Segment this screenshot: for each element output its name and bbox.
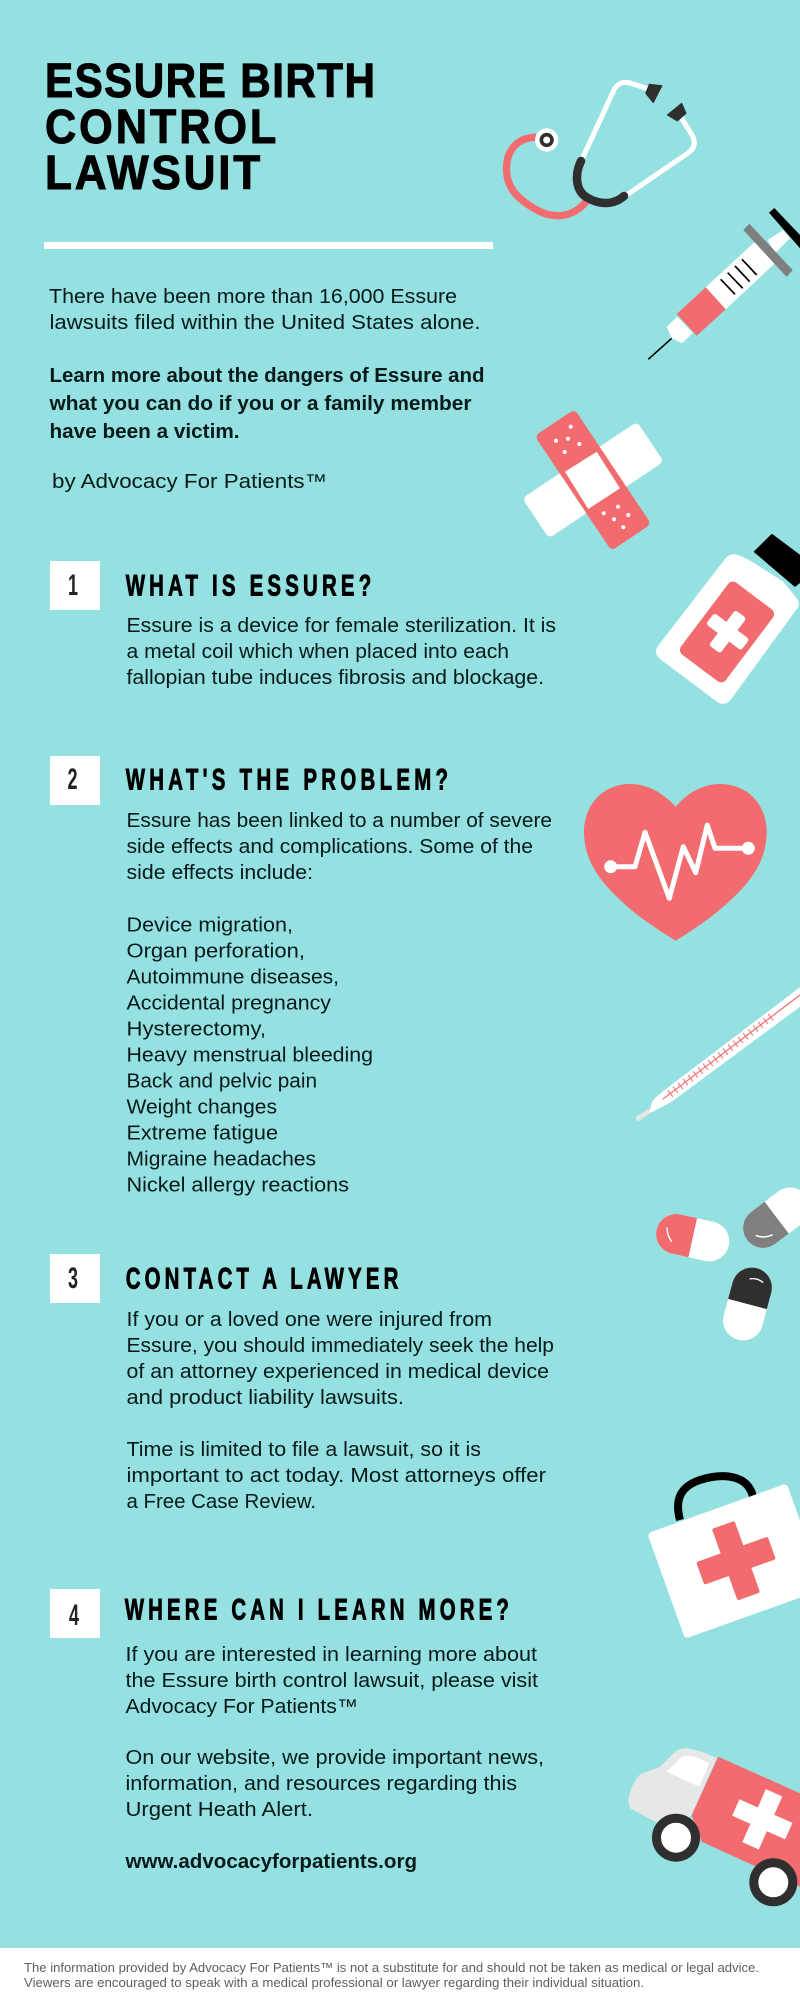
side effects list: Extreme fatigue [126, 1122, 278, 1144]
number badge 1 [50, 561, 100, 610]
body 4: If you are interested in learning more about [126, 1644, 537, 1666]
side effects list: Hysterectomy, [126, 1018, 266, 1040]
icon: heart with pulse [584, 784, 767, 941]
title: CONTROL [45, 100, 276, 154]
body 4: information, and resources regarding this [126, 1773, 517, 1795]
intro text [49, 286, 480, 334]
side effects list [126, 914, 373, 1196]
icon: syringe [648, 208, 800, 359]
body 4 [126, 1644, 544, 1821]
body 3: Essure, you should immediately seek the help [126, 1335, 554, 1357]
icon: bandage [522, 409, 664, 551]
body 3: and product liability lawsuits. [126, 1387, 404, 1409]
body 2: side effects include: [126, 862, 313, 884]
body 3: Time is limited to file a lawsuit, so it is [126, 1439, 481, 1461]
side effects list: Autoimmune diseases, [126, 966, 339, 988]
body 3: important to act today. Most attorneys offer [126, 1465, 546, 1487]
heading 3: CONTACT A LAWYER [126, 1263, 398, 1296]
footer disclaimer: The information provided by Advocacy For Patients™ is not a substitute for and should not be taken as medical or legal advice. [24, 1960, 759, 1975]
pill: black and white [719, 1263, 776, 1345]
number badge 4: 4 [69, 1600, 79, 1632]
title: LAWSUIT [45, 145, 260, 199]
body 2: Essure has been linked to a number of severe [126, 810, 552, 832]
pill: coral and white [652, 1210, 733, 1265]
number badge 3: 3 [68, 1263, 78, 1295]
body 4: the Essure birth control lawsuit, please visit [126, 1670, 538, 1692]
footer disclaimer [0, 1948, 800, 2000]
website link: www.advocacyforpatients.org [124, 1851, 417, 1873]
body 2 [126, 810, 552, 884]
icon: thermometer [638, 987, 800, 1118]
body 4: Urgent Heath Alert. [126, 1799, 313, 1821]
body 2: side effects and complications. Some of the [126, 836, 533, 858]
heading 1: WHAT IS ESSURE? [126, 570, 371, 603]
side effects list: Nickel allergy reactions [126, 1174, 349, 1196]
side effects list: Migraine headaches [126, 1148, 316, 1170]
number badge 3 [50, 1254, 100, 1303]
bold call to learn more [48, 365, 485, 443]
section 1: what is essure [50, 561, 556, 689]
body 3: of an attorney experienced in medical device [126, 1361, 549, 1383]
body 1: fallopian tube induces fibrosis and blockage. [126, 667, 544, 689]
side effects list: Back and pelvic pain [126, 1070, 317, 1092]
side effects list: Heavy menstrual bleeding [126, 1044, 373, 1066]
title: ESSURE BIRTH [45, 53, 375, 108]
section 4: where can i learn more [50, 1589, 544, 1873]
bold call to learn more: have been a victim. [50, 421, 240, 443]
icon: stethoscope [506, 82, 694, 216]
side effects list: Organ perforation, [126, 940, 305, 962]
bold call to learn more: what you can do if you or a family member [48, 393, 472, 415]
number badge 1: 1 [68, 570, 78, 602]
body 1 [126, 615, 556, 689]
section 2: what's the problem [50, 756, 552, 1196]
body 1: Essure is a device for female sterilization. It is [126, 615, 556, 637]
number badge 2: 2 [67, 764, 78, 796]
pill: grey and white [735, 1179, 800, 1256]
body 3: If you or a loved one were injured from [126, 1309, 492, 1331]
number badge 2 [50, 756, 100, 805]
body 1: a metal coil which when placed into each [126, 641, 509, 663]
side effects list: Accidental pregnancy [126, 992, 331, 1014]
body 4: On our website, we provide important news, [126, 1747, 544, 1769]
footer disclaimer: Viewers are encouraged to speak with a medical professional or lawyer regarding their individual situation. [24, 1975, 644, 1990]
intro text: There have been more than 16,000 Essure [49, 286, 457, 308]
intro text: lawsuits filed within the United States alone. [50, 312, 480, 334]
icon: ambulance [628, 1748, 800, 1902]
body 3 [126, 1309, 554, 1513]
side effects list: Weight changes [126, 1096, 277, 1118]
icon: pills [652, 1179, 800, 1345]
side effects list: Device migration, [126, 914, 293, 936]
icon: first aid kit [647, 1476, 800, 1639]
byline: by Advocacy For Patients™ [52, 471, 327, 493]
bold call to learn more: Learn more about the dangers of Essure and [50, 365, 485, 387]
body 4: Advocacy For Patients™ [126, 1696, 358, 1718]
number badge 4 [50, 1589, 100, 1638]
icon: medicine bottle [656, 535, 800, 704]
heading 4: WHERE CAN I LEARN MORE? [125, 1594, 509, 1627]
heading 2: WHAT'S THE PROBLEM? [126, 764, 448, 797]
body 3: a Free Case Review. [126, 1491, 316, 1513]
title [45, 53, 375, 199]
section 3: contact a lawyer [50, 1254, 554, 1513]
